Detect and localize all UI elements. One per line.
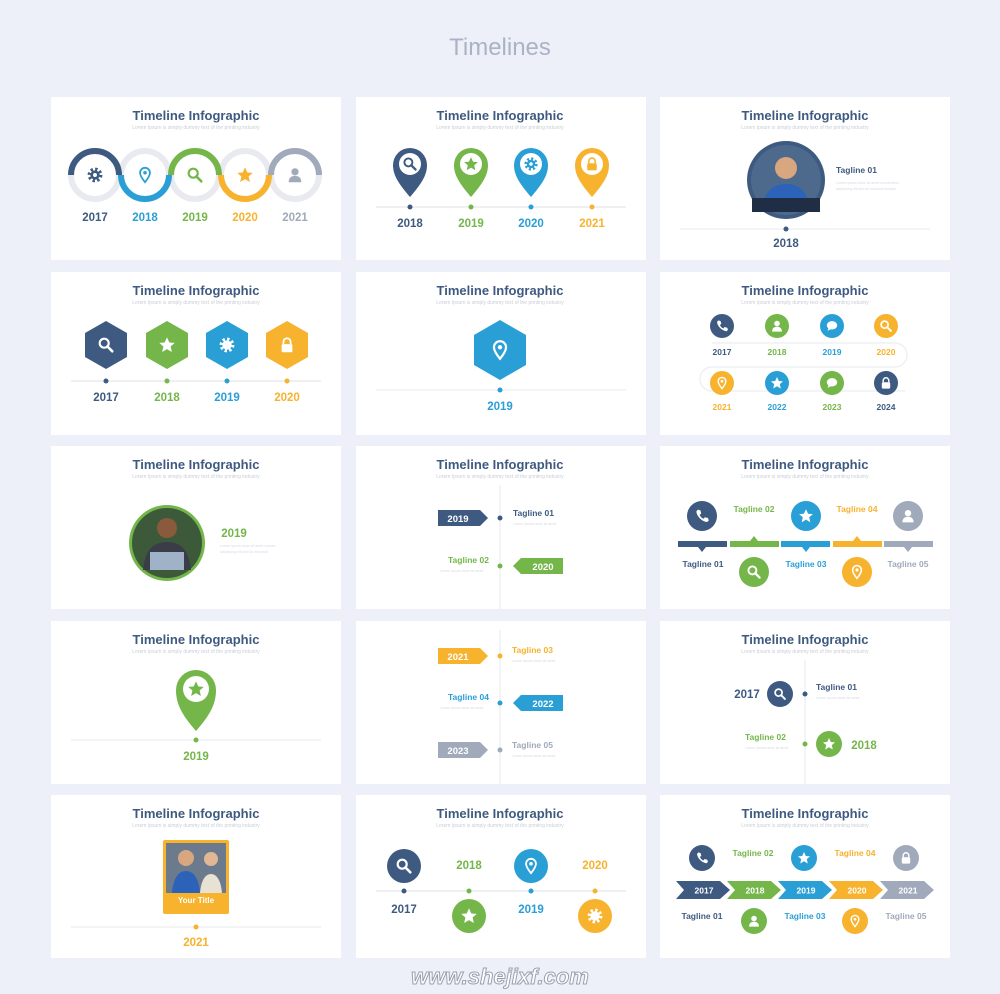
card 3: photo single event: Tagline 01: [836, 165, 877, 175]
card 15: chevron timeline: Tagline 02: [733, 848, 774, 858]
card 9: bar with circles and taglines: Lorem Ipsum is simply dummy text of the printing industry: [741, 474, 869, 480]
card 11: tag arrows vertical timeline (2021-2023): 2022: [532, 699, 554, 710]
card 3: photo single event: Lorem ipsum dolor sit amet consectetur: [836, 181, 900, 185]
card 15: chevron timeline: [660, 795, 950, 958]
card 11: tag arrows vertical timeline (2021-2023): Lorem ipsum dolor sit amet: [512, 754, 555, 758]
card 13: photo card 2021: Your Title: [178, 896, 215, 905]
card 7: photo circle 2019: Timeline Infographic: [133, 457, 259, 472]
card 5: single hexagon: Timeline Infographic: [437, 283, 563, 298]
card 10: single green pin: Lorem Ipsum is simply dummy text of the printing industry: [132, 649, 260, 655]
card 6: two-row icon timeline: 2022: [768, 402, 787, 412]
card 1: circle wave timeline: 2018: [132, 212, 158, 224]
card 11: tag arrows vertical timeline (2021-2023): Tagline 04: [448, 692, 489, 702]
card 12: vertical line with circles: [660, 621, 950, 784]
card 8: tag arrows vertical timeline (2019-2020): 2019: [447, 514, 469, 525]
card 12: vertical line with circles: Tagline 02: [745, 732, 786, 742]
card 3: photo single event: [660, 97, 950, 260]
card 11: tag arrows vertical timeline (2021-2023): 2023: [447, 746, 469, 757]
card 15: chevron timeline: 2019: [797, 886, 816, 896]
card 13: photo card 2021: Lorem Ipsum is simply dummy text of the printing industry: [132, 823, 260, 829]
card 12: vertical line with circles: Lorem ipsum dolor sit amet: [816, 696, 859, 700]
card 8: tag arrows vertical timeline (2019-2020): Tagline 01: [513, 508, 554, 518]
card 3: photo single event: adipiscing elit sed do eiusmod tempor: [836, 187, 897, 191]
card 10: single green pin: [51, 621, 341, 784]
card 7: photo circle 2019: 2019: [221, 528, 247, 540]
card 11: tag arrows vertical timeline (2021-2023): Lorem ipsum dolor sit amet: [440, 706, 483, 710]
card 1: circle wave timeline: Timeline Infographic: [133, 108, 259, 123]
card 4: hexagon timeline: 2019: [214, 392, 240, 404]
card 4: hexagon timeline: Timeline Infographic: [133, 283, 259, 298]
card 5: single hexagon: Lorem Ipsum is simply dummy text of the printing industry: [436, 300, 564, 306]
card 12: vertical line with circles: Timeline Infographic: [742, 632, 868, 647]
card 9: bar with circles and taglines: Tagline 03: [786, 559, 827, 569]
card 5: single hexagon: 2019: [487, 401, 513, 413]
card 1: circle wave timeline: 2021: [282, 212, 308, 224]
card 11: tag arrows vertical timeline (2021-2023): Lorem ipsum dolor sit amet: [512, 659, 555, 663]
card 15: chevron timeline: 2018: [746, 886, 765, 896]
card 15: chevron timeline: Timeline Infographic: [742, 806, 868, 821]
card 9: bar with circles and taglines: [660, 446, 950, 609]
card 15: chevron timeline: 2020: [848, 886, 867, 896]
card 11: tag arrows vertical timeline (2021-2023): Tagline 03: [512, 645, 553, 655]
card 1: circle wave timeline: Lorem Ipsum is simply dummy text of the printing industry: [132, 125, 260, 131]
card 2: map pin timeline: 2018: [397, 218, 423, 230]
card 12: vertical line with circles: Tagline 01: [816, 682, 857, 692]
card 8: tag arrows vertical timeline (2019-2020): Lorem ipsum dolor sit amet: [513, 522, 556, 526]
card 8: tag arrows vertical timeline (2019-2020): Lorem ipsum dolor sit amet: [440, 569, 483, 573]
card 9: bar with circles and taglines: Tagline 01: [683, 559, 724, 569]
card 12: vertical line with circles: Lorem Ipsum is simply dummy text of the printing industry: [741, 649, 869, 655]
card 6: two-row icon timeline: 2024: [877, 402, 896, 412]
card 6: two-row icon timeline: [660, 272, 950, 435]
card 2: map pin timeline: 2019: [458, 218, 484, 230]
card 7: photo circle 2019: adipiscing elit sed do eiusmod: [220, 550, 268, 554]
card 8: tag arrows vertical timeline (2019-2020): Timeline Infographic: [437, 457, 563, 472]
card 6: two-row icon timeline: 2017: [713, 347, 732, 357]
card 1: circle wave timeline: 2020: [232, 212, 258, 224]
card 7: photo circle 2019: Lorem Ipsum is simply dummy text of the printing industry: [132, 474, 260, 480]
card 14: alternating circles timeline: 2020: [582, 860, 608, 872]
card 6: two-row icon timeline: 2019: [823, 347, 842, 357]
card 15: chevron timeline: 2021: [899, 886, 918, 896]
card 14: alternating circles timeline: 2019: [518, 904, 544, 916]
card 9: bar with circles and taglines: Tagline 05: [888, 559, 929, 569]
card 6: two-row icon timeline: Lorem Ipsum is simply dummy text of the printing industry: [741, 300, 869, 306]
card 8: tag arrows vertical timeline (2019-2020): Lorem Ipsum is simply dummy text of the printing industry: [436, 474, 564, 480]
card 6: two-row icon timeline: 2023: [823, 402, 842, 412]
card 3: photo single event: Timeline Infographic: [742, 108, 868, 123]
card 9: bar with circles and taglines: Tagline 02: [734, 504, 775, 514]
card 2: map pin timeline: 2021: [579, 218, 605, 230]
card 2: map pin timeline: [356, 97, 646, 260]
card 13: photo card 2021: [51, 795, 341, 958]
card 12: vertical line with circles: Lorem ipsum dolor sit amet: [745, 746, 788, 750]
card 14: alternating circles timeline: 2018: [456, 860, 482, 872]
card 4: hexagon timeline: 2018: [154, 392, 180, 404]
card 15: chevron timeline: Tagline 05: [886, 911, 927, 921]
card 6: two-row icon timeline: 2021: [713, 402, 732, 412]
card 8: tag arrows vertical timeline (2019-2020): 2020: [532, 562, 554, 573]
card 6: two-row icon timeline: 2018: [768, 347, 787, 357]
card 13: photo card 2021: 2021: [183, 937, 209, 949]
card 1: circle wave timeline: [51, 97, 341, 260]
card 7: photo circle 2019: [51, 446, 341, 609]
card 12: vertical line with circles: 2018: [851, 740, 877, 752]
card 8: tag arrows vertical timeline (2019-2020): [356, 446, 646, 609]
card 15: chevron timeline: Tagline 04: [835, 848, 876, 858]
card 6: two-row icon timeline: 2020: [877, 347, 896, 357]
card 4: hexagon timeline: 2017: [93, 392, 119, 404]
card 9: bar with circles and taglines: Tagline 04: [837, 504, 878, 514]
card 2: map pin timeline: Lorem Ipsum is simply dummy text of the printing industry: [436, 125, 564, 131]
card 14: alternating circles timeline: Timeline Infographic: [437, 806, 563, 821]
card 4: hexagon timeline: 2020: [274, 392, 300, 404]
card 11: tag arrows vertical timeline (2021-2023): 2021: [447, 652, 469, 663]
card 15: chevron timeline: Tagline 03: [785, 911, 826, 921]
card 6: two-row icon timeline: Timeline Infographic: [742, 283, 868, 298]
card 14: alternating circles timeline: Lorem Ipsum is simply dummy text of the printing industry: [436, 823, 564, 829]
card 11: tag arrows vertical timeline (2021-2023): Tagline 05: [512, 740, 553, 750]
card 15: chevron timeline: Lorem Ipsum is simply dummy text of the printing industry: [741, 823, 869, 829]
card 11: tag arrows vertical timeline (2021-2023): [356, 621, 646, 784]
card 10: single green pin: Timeline Infographic: [133, 632, 259, 647]
card 8: tag arrows vertical timeline (2019-2020): Tagline 02: [448, 555, 489, 565]
card 12: vertical line with circles: 2017: [734, 689, 760, 701]
card 14: alternating circles timeline: [356, 795, 646, 958]
card 15: chevron timeline: 2017: [695, 886, 714, 896]
card 4: hexagon timeline: [51, 272, 341, 435]
card 7: photo circle 2019: Lorem ipsum dolor sit amet consec: [220, 544, 276, 548]
watermark: www.shejixf.com: [411, 964, 589, 989]
card 2: map pin timeline: Timeline Infographic: [437, 108, 563, 123]
card 9: bar with circles and taglines: Timeline Infographic: [742, 457, 868, 472]
card 2: map pin timeline: 2020: [518, 218, 544, 230]
card 1: circle wave timeline: 2017: [82, 212, 108, 224]
page title: Timelines: [449, 34, 551, 61]
card 5: single hexagon: [356, 272, 646, 435]
card 14: alternating circles timeline: 2017: [391, 904, 417, 916]
card 3: photo single event: Lorem Ipsum is simply dummy text of the printing industry: [741, 125, 869, 131]
card 3: photo single event: 2018: [773, 238, 799, 250]
card 10: single green pin: 2019: [183, 751, 209, 763]
card 4: hexagon timeline: Lorem Ipsum is simply dummy text of the printing industry: [132, 300, 260, 306]
card 15: chevron timeline: Tagline 01: [682, 911, 723, 921]
card 1: circle wave timeline: 2019: [182, 212, 208, 224]
card 13: photo card 2021: Timeline Infographic: [133, 806, 259, 821]
